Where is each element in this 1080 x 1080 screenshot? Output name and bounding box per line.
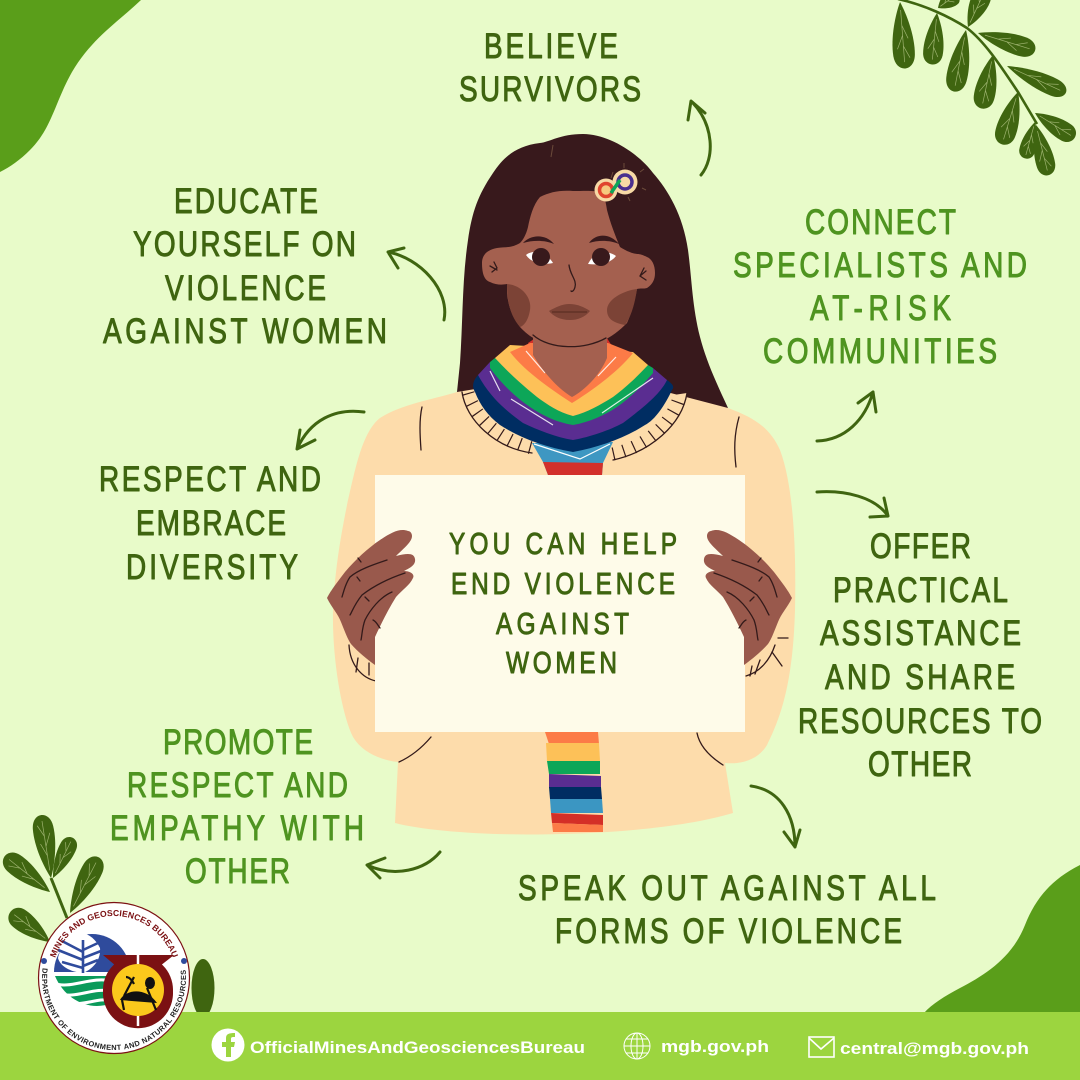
icon: facebook	[212, 1028, 244, 1062]
text: connect specialists: COMMUNITIES	[763, 331, 997, 371]
sweater body	[333, 385, 795, 835]
ears detail	[490, 262, 646, 280]
footer text: email: central@mgb.gov.ph	[840, 1039, 1029, 1058]
footer bar	[0, 1012, 1080, 1080]
eyes	[526, 248, 616, 266]
eyebrows	[523, 236, 619, 244]
seal: maroon ring with tools	[103, 955, 174, 1028]
text: promote respect and empathy: RESPECT AND	[127, 765, 348, 805]
text: offer practical assistance: AND SHARE	[825, 657, 1015, 697]
scarf rainbow layers	[473, 343, 673, 459]
text: connect specialists: SPECIALISTS AND	[733, 245, 1027, 285]
corner shape: top left	[0, 0, 141, 172]
text: promote respect and empathy	[110, 722, 364, 891]
collar ribbing	[462, 392, 687, 460]
illustration: woman holding sign	[327, 134, 795, 835]
text: connect specialists: CONNECT	[805, 202, 956, 242]
text: believe survivors	[459, 26, 641, 109]
text: educate yourself: VIOLENCE	[165, 268, 326, 308]
sign text	[449, 526, 677, 680]
text: speak out	[518, 868, 936, 951]
text: speak out: FORMS OF VIOLENCE	[555, 911, 902, 951]
text: believe survivors: BELIEVE	[484, 26, 618, 66]
arrow: to speak out	[751, 786, 800, 847]
text: educate yourself: AGAINST WOMEN	[103, 311, 387, 351]
text: offer practical assistance: OFFER	[870, 526, 971, 566]
text: educate yourself: EDUCATE	[174, 181, 318, 221]
seal: blue disc with pine	[53, 932, 130, 1006]
left hand	[327, 530, 415, 665]
hair	[457, 134, 728, 420]
text: believe survivors: SURVIVORS	[459, 69, 641, 109]
sign text: END VIOLENCE	[451, 566, 675, 601]
lips	[549, 304, 590, 320]
neck shadow	[528, 335, 612, 380]
hair clip	[594, 163, 646, 202]
sign text: WOMEN	[506, 645, 617, 680]
corner shape: bottom right	[924, 865, 1080, 1013]
arrow: to educate yourself	[388, 248, 445, 320]
text: educate yourself: YOURSELF ON	[133, 224, 356, 264]
text: promote respect and empathy: PROMOTE	[163, 722, 313, 762]
text: respect and embrace diversity	[99, 459, 321, 587]
footer text: facebook: OfficialMinesAndGeosciencesBureau	[250, 1038, 585, 1057]
arrow: to believe survivors	[688, 101, 710, 175]
text: offer practical assistance: RESOURCES TO	[798, 701, 1042, 741]
arrow: to promote respect	[367, 852, 440, 878]
cheeks	[507, 284, 637, 327]
arrow: to connect specialists	[817, 392, 876, 441]
text: promote respect and empathy: EMPATHY WITH	[110, 808, 364, 848]
text: educate yourself	[103, 181, 387, 351]
arrow: to offer assistance	[817, 492, 888, 517]
footer text: website: mgb.gov.ph	[661, 1037, 769, 1056]
icon: globe	[624, 1033, 650, 1059]
scarf lower blue and red	[532, 442, 613, 475]
text: promote respect and empathy: OTHER	[185, 851, 290, 891]
cuffs	[349, 638, 788, 681]
arrow: to respect and embrace	[297, 411, 364, 449]
sign text: AGAINST	[496, 606, 629, 641]
text: offer practical assistance: PRACTICAL	[833, 570, 1008, 610]
hair parting	[551, 145, 553, 157]
chin line	[533, 335, 606, 347]
face	[482, 191, 655, 347]
sweater fold lines	[399, 407, 739, 765]
text: connect specialists: AT-RISK	[810, 288, 951, 328]
seal: circular lettering	[42, 910, 186, 1050]
sign text: YOU CAN HELP	[449, 526, 677, 561]
scarf tail stripes	[545, 732, 603, 832]
text: respect and embrace diversity: EMBRACE	[136, 503, 286, 543]
text: respect and embrace diversity: RESPECT AND	[99, 459, 321, 499]
text: offer practical assistance	[798, 526, 1042, 784]
neck	[533, 335, 607, 397]
decorative plant: bottom left	[0, 813, 215, 1017]
icon: envelope	[809, 1037, 834, 1057]
seal: circular lettering: MINES AND GEOSCIENCES BUREAU	[50, 910, 178, 958]
logo: mines and geosciences bureau seal	[38, 902, 190, 1054]
seal: circular lettering: DEPARTMENT OF ENVIRONMENT AND NATURAL RESOURCES	[42, 968, 186, 1050]
nose	[569, 265, 575, 291]
text: speak out: SPEAK OUT AGAINST ALL	[518, 868, 936, 908]
text: offer practical assistance: ASSISTANCE	[820, 613, 1021, 653]
text: offer practical assistance: OTHER	[868, 744, 972, 784]
text: connect specialists	[733, 202, 1027, 371]
right hand	[704, 530, 792, 665]
decorative branch: top right	[889, 0, 1080, 178]
text: respect and embrace diversity: DIVERSITY	[126, 547, 298, 587]
sign board	[375, 475, 745, 732]
